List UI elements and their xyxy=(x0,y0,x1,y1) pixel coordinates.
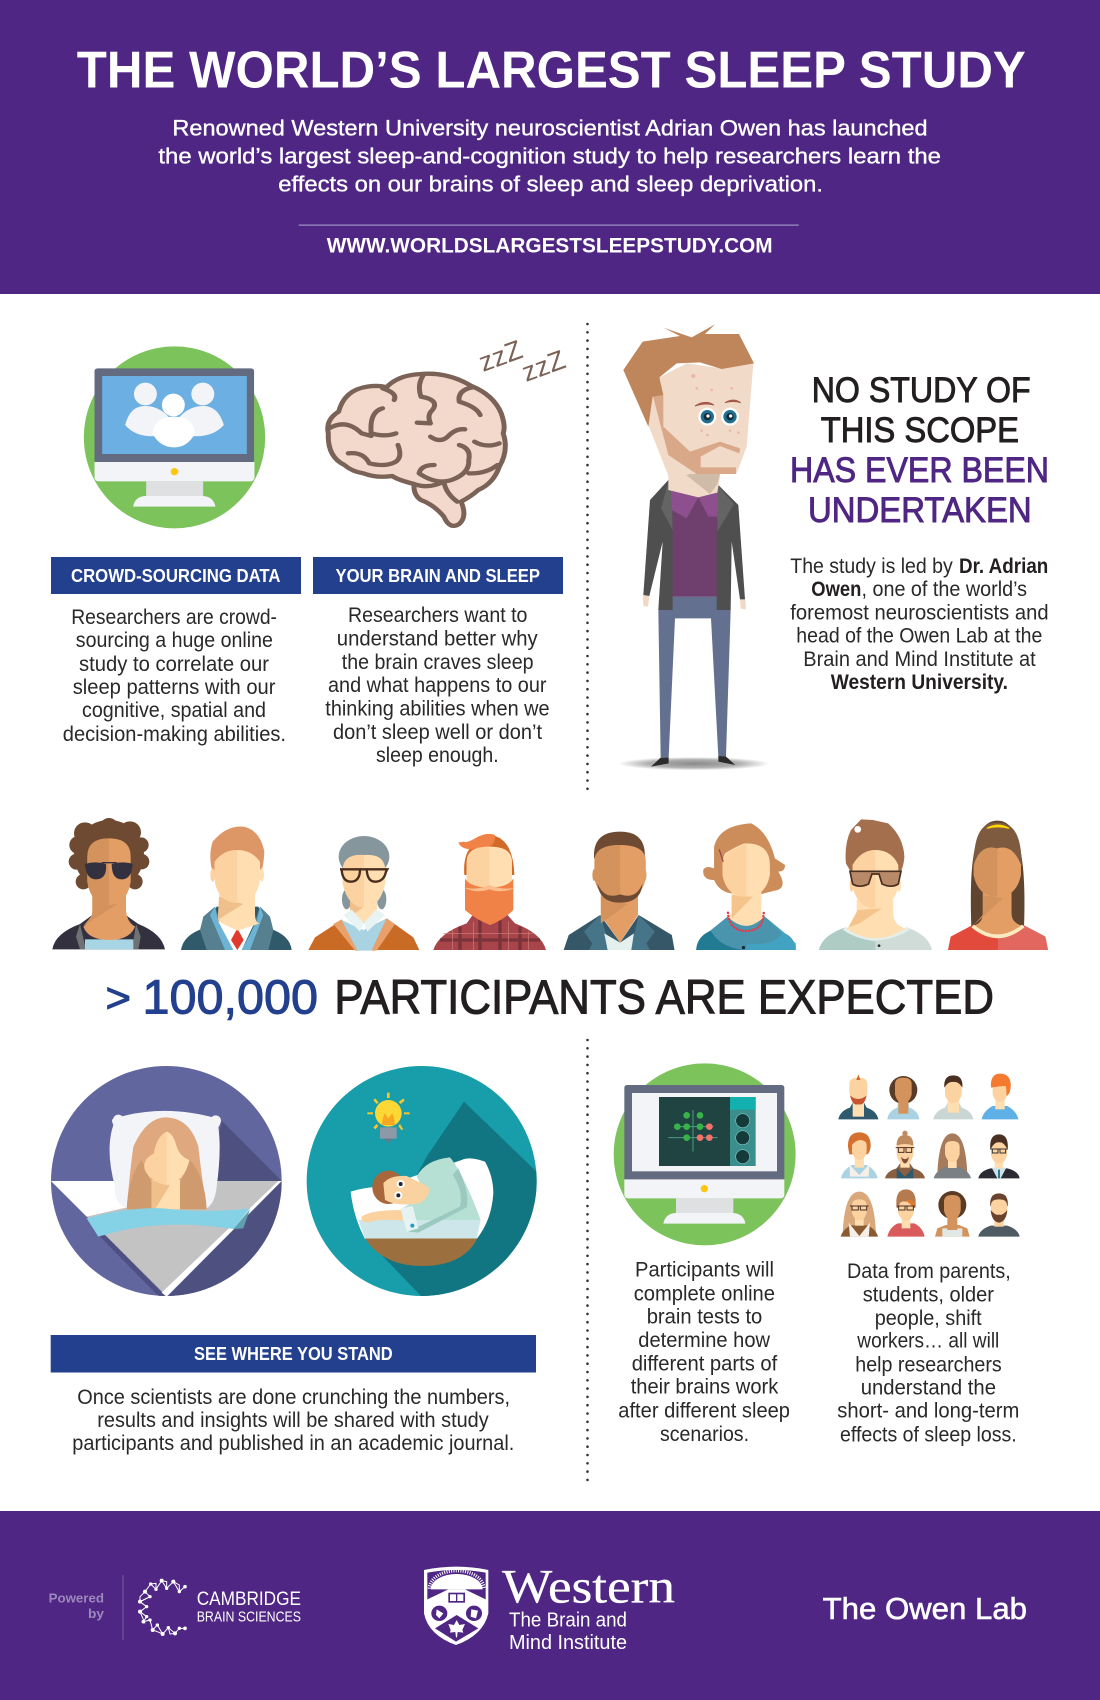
text: study leader description: The study is led by xyxy=(790,555,953,578)
text: online brain tests description: different parts of xyxy=(632,1353,777,1376)
text: online brain tests description: scenarios. xyxy=(660,1423,749,1446)
text: brain and sleep description: the brain craves sleep xyxy=(342,651,534,674)
text: online brain tests description: brain tests to xyxy=(647,1306,762,1329)
avatar: spiky hair with sunglasses xyxy=(819,819,932,950)
heading: no study of this scope xyxy=(790,371,1049,530)
text: data sources description: help researchers xyxy=(855,1353,1002,1376)
text: brain and sleep description xyxy=(325,604,550,767)
panel: crowd-sourcing data: CROWD-SOURCING DATA xyxy=(71,565,280,586)
text: online brain tests description: complete online xyxy=(634,1283,775,1306)
avatar: woman with long hair and headband xyxy=(948,821,1048,950)
text: data sources description: students, older xyxy=(863,1284,994,1307)
heading: no study of this scope: NO STUDY OF xyxy=(812,371,1031,410)
text: study leader description: Dr. Adrian xyxy=(959,555,1048,578)
icon: man awake in bed with light bulb xyxy=(303,1063,540,1300)
panel: see where you stand: SEE WHERE YOU STAND xyxy=(194,1343,393,1364)
text: crowd-sourcing description: sourcing a huge online xyxy=(76,629,273,652)
text: Western The Brain and Mind Institute: Mind Institute xyxy=(509,1632,627,1654)
avatar: curly hair with sunglasses xyxy=(52,818,165,949)
text: study leader description: Owen xyxy=(811,578,861,601)
title: THE WORLD’S LARGEST SLEEP STUDY xyxy=(77,41,1026,99)
text: brain and sleep description: Researchers want to xyxy=(348,604,527,627)
avatar: woman with necklace xyxy=(696,823,796,950)
text: online brain tests description: Participants will xyxy=(635,1259,774,1282)
logo: Cambridge Brain Sciences xyxy=(138,1579,301,1636)
intro paragraph: Renowned Western University neuroscientist Adrian Owen has launched xyxy=(172,116,928,141)
website url: WWW.WORLDSLARGESTSLEEPSTUDY.COM xyxy=(327,235,773,258)
text: study leader description: , one of the world’s xyxy=(862,578,1027,601)
panel: crowd-sourcing data xyxy=(51,557,301,746)
heading: no study of this scope: UNDERTAKEN xyxy=(808,491,1032,530)
powered by label: Powered xyxy=(49,1591,104,1606)
heading: no study of this scope: HAS EVER BEEN xyxy=(790,451,1049,490)
footer banner xyxy=(0,1511,1100,1700)
text: results description xyxy=(72,1386,514,1455)
panel: your brain and sleep: YOUR BRAIN AND SLEEP xyxy=(336,565,540,586)
text: study leader description: Western University. xyxy=(831,671,1008,694)
text: study leader description xyxy=(790,555,1049,694)
text: crowd-sourcing description: cognitive, spatial and xyxy=(82,699,266,722)
text: Western The Brain and Mind Institute: Western xyxy=(502,1561,675,1614)
text: brain and sleep description: thinking abilities when we xyxy=(325,698,550,721)
text: crowd-sourcing description xyxy=(63,606,286,746)
text: brain and sleep description: sleep enough. xyxy=(376,744,499,767)
text: brain and sleep description: and what happens to our xyxy=(328,674,546,697)
text: brain and sleep description: don’t sleep well or don’t xyxy=(333,721,542,744)
avatar: grey-haired woman with glasses xyxy=(308,836,419,951)
logo: Cambridge Brain Sciences: CAMBRIDGE xyxy=(197,1588,301,1610)
logo: Western University shield xyxy=(424,1567,488,1645)
text: data sources description: understand the xyxy=(861,1377,996,1400)
heading: 100,000 participants expected xyxy=(106,972,994,1025)
intro paragraph xyxy=(158,116,941,196)
text: online brain tests description: determine how xyxy=(638,1329,771,1352)
illustration: Dr. Adrian Owen character xyxy=(618,324,770,770)
text: online brain tests description: after different sleep xyxy=(618,1399,790,1422)
text: brain and sleep description: understand better why xyxy=(337,628,538,651)
header banner xyxy=(0,0,1100,294)
heading: 100,000 participants expected: 100,000 xyxy=(142,972,318,1025)
avatars row: participants xyxy=(52,818,546,951)
avatar: man with red beard xyxy=(433,834,546,950)
icon: sleeping brain: zzZ xyxy=(518,344,569,388)
text: data sources description: short- and long-term xyxy=(837,1400,1019,1423)
text: results description: participants and published in an academic journal. xyxy=(72,1432,514,1455)
powered by label: by xyxy=(88,1606,105,1621)
text: crowd-sourcing description: study to correlate our xyxy=(79,653,269,676)
icon: sleeping brain xyxy=(328,334,569,526)
text: crowd-sourcing description: Researchers are crowd- xyxy=(71,606,277,629)
text: crowd-sourcing description: sleep patterns with our xyxy=(73,676,276,699)
intro paragraph: effects on our brains of sleep and sleep deprivation. xyxy=(278,171,823,196)
avatar: man with tie xyxy=(181,827,292,950)
text: online brain tests description: their brains work xyxy=(631,1376,779,1399)
logo: Cambridge Brain Sciences: BRAIN SCIENCES xyxy=(197,1610,301,1626)
text: study leader description: Brain and Mind Institute at xyxy=(803,648,1036,671)
heading: no study of this scope: THIS SCOPE xyxy=(821,411,1019,450)
text: data sources description: people, shift xyxy=(875,1307,982,1330)
text: results description: results and insights will be shared with study xyxy=(97,1409,489,1432)
text: data sources description: workers… all will xyxy=(856,1330,999,1353)
panel: your brain and sleep xyxy=(313,557,563,767)
panel: see where you stand xyxy=(51,1335,536,1455)
text: crowd-sourcing description: decision-making abilities. xyxy=(63,723,286,746)
avatar: man with goatee xyxy=(564,832,675,950)
heading: 100,000 participants expected: PARTICIPANTS ARE EXPECTED xyxy=(334,972,994,1025)
text: The Owen Lab: The Owen Lab xyxy=(823,1591,1027,1626)
text: data sources description: Data from parents, xyxy=(847,1260,1011,1283)
icon: monitor with crowd xyxy=(84,346,265,528)
icon: woman in bed xyxy=(47,1063,287,1300)
powered by label xyxy=(49,1591,105,1621)
text: data sources description xyxy=(837,1260,1019,1446)
text: online brain tests description xyxy=(618,1259,790,1446)
text: results description: Once scientists are done crunching the numbers, xyxy=(77,1386,510,1409)
text: Western The Brain and Mind Institute xyxy=(502,1561,675,1654)
avatars row: participants continued xyxy=(564,819,1048,950)
zzz text: zzZ xyxy=(475,334,526,378)
heading: 100,000 participants expected: > xyxy=(106,974,131,1021)
text: Western The Brain and Mind Institute: The Brain and xyxy=(509,1610,627,1632)
avatars grid: diverse participants xyxy=(838,1074,1020,1237)
icon: monitor with brain test xyxy=(614,1063,796,1245)
text: study leader description: foremost neuroscientists and xyxy=(790,601,1049,624)
text: data sources description: effects of sleep loss. xyxy=(840,1423,1017,1446)
text: study leader description: head of the Owen Lab at the xyxy=(796,625,1042,648)
intro paragraph: the world’s largest sleep-and-cognition study to help researchers learn the xyxy=(158,144,941,169)
